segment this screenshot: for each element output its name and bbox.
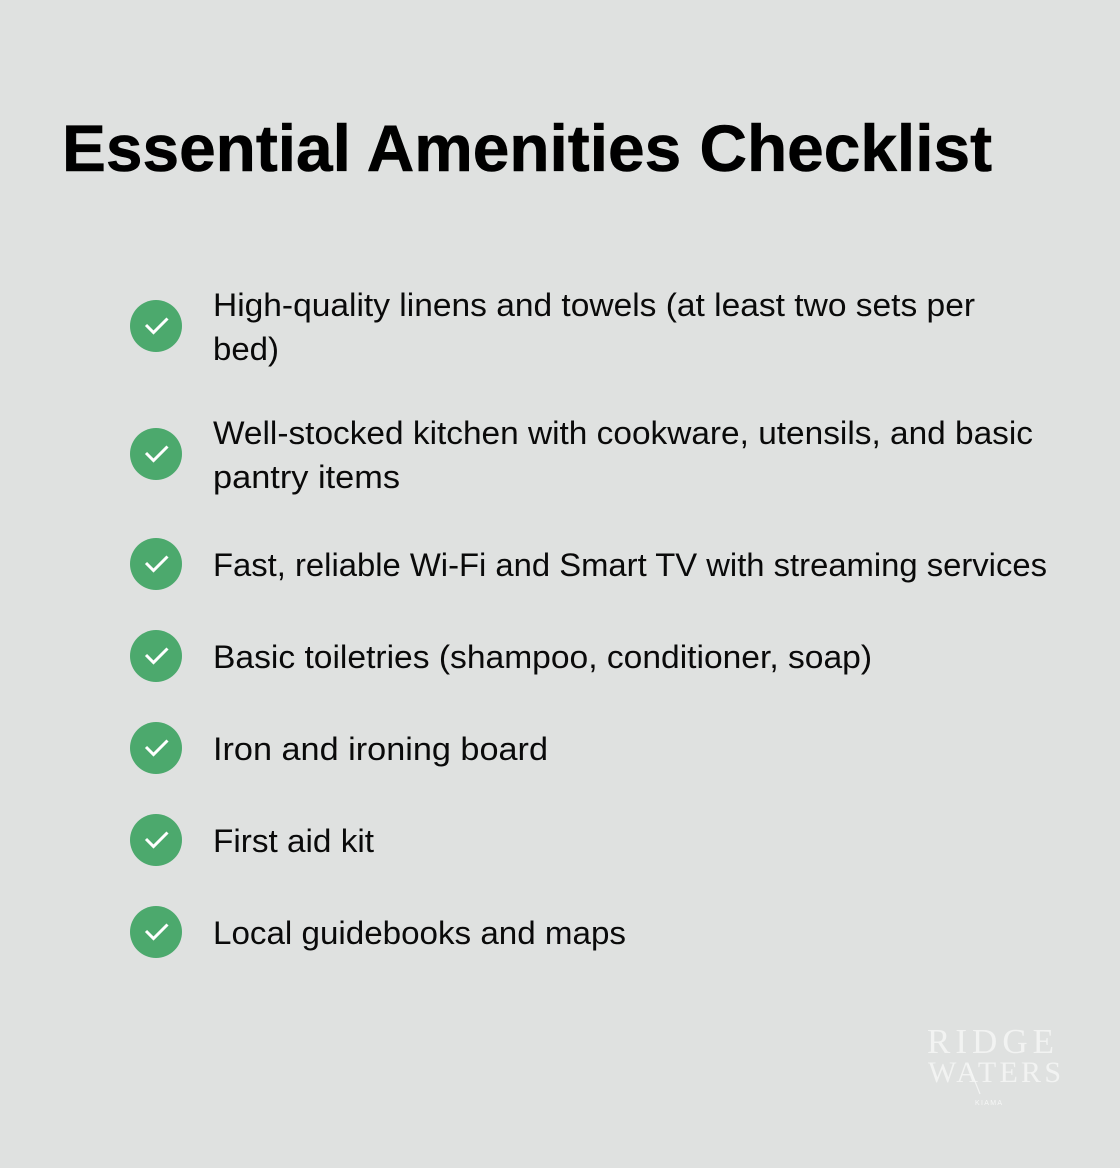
text: kitchen: pantry items [213, 459, 400, 495]
text: kitchen: Well-stocked kitchen with cookware, utensils, and basic [213, 415, 1033, 451]
logo: Ridge Waters Kiama: WATERS [928, 1056, 1061, 1089]
item: Wi-Fi and TV [130, 538, 1047, 590]
item: toiletries [130, 630, 872, 682]
icon: check mark [130, 428, 182, 480]
icon: check mark [130, 630, 182, 682]
item: linens and towels [130, 287, 975, 367]
icon: check mark [130, 814, 182, 866]
text: first aid: First aid kit [213, 823, 374, 859]
logo: Ridge Waters Kiama [927, 1022, 1061, 1107]
item: iron [130, 722, 548, 774]
text: toiletries: Basic toiletries (shampoo, conditioner, soap) [213, 639, 872, 675]
icon: check mark [130, 906, 182, 958]
text: linens and towels: bed) [213, 331, 279, 367]
logo: Ridge Waters Kiama: KIAMA [975, 1100, 1002, 1107]
text: Wi-Fi and TV: Fast, reliable Wi-Fi and Smart TV with streaming services [213, 547, 1047, 583]
text: linens and towels: High-quality linens and towels (at least two sets per [213, 287, 975, 323]
text: iron: Iron and ironing board [213, 731, 548, 767]
title: Essential Amenities Checklist [62, 111, 992, 185]
icon: check mark [130, 538, 182, 590]
logo: Ridge Waters Kiama: RIDGE [927, 1022, 1054, 1061]
item: kitchen [130, 415, 1033, 495]
checklist [130, 287, 1047, 958]
item: guidebooks [130, 906, 626, 958]
icon: check mark [130, 722, 182, 774]
icon: check mark [130, 300, 182, 352]
item: first aid [130, 814, 374, 866]
text: guidebooks: Local guidebooks and maps [213, 915, 626, 951]
